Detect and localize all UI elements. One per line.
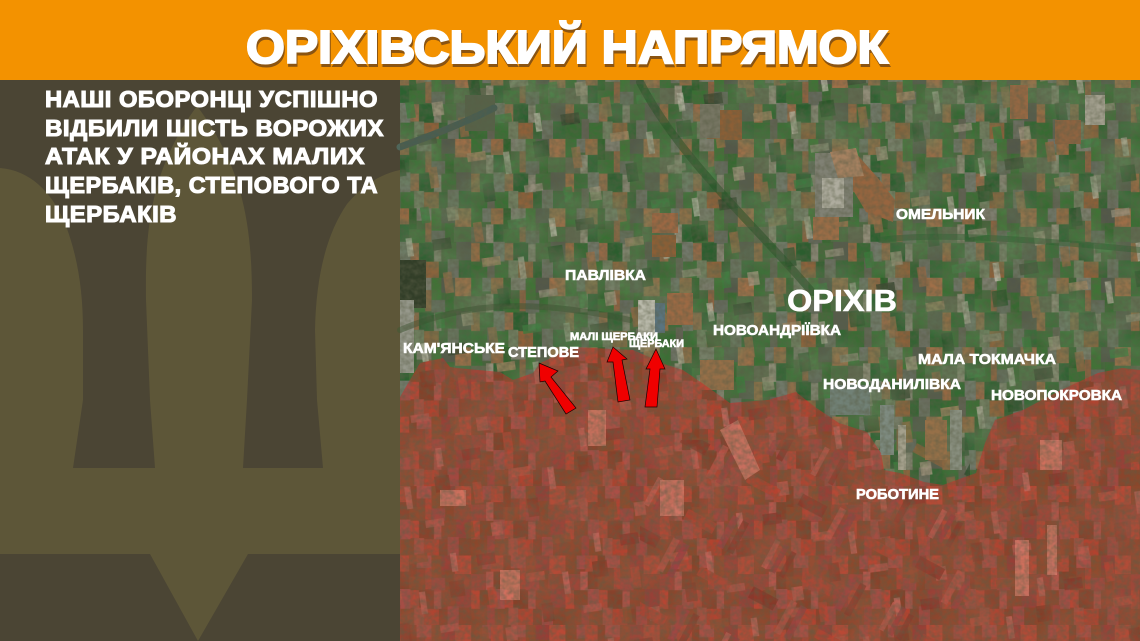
label: Orikhiv: ОРІХІВ xyxy=(787,283,897,318)
map fields xyxy=(400,80,1140,641)
arrow: attack on Stepove xyxy=(539,363,576,414)
map labels xyxy=(403,206,1122,503)
label: Mali Shcherbaky: МАЛІ ЩЕРБАКИ xyxy=(570,331,658,343)
distinct fields xyxy=(400,85,1105,470)
label: Stepove: СТЕПОВЕ xyxy=(508,344,579,361)
text block: summary: ЩЕРБАКІВ xyxy=(45,201,177,227)
text block: summary: ВІДБИЛИ ШІСТЬ ВОРОЖИХ xyxy=(45,115,384,141)
text block: summary xyxy=(45,86,384,227)
label: Robotyne: РОБОТИНЕ xyxy=(856,486,939,503)
label: Novodanylivka: НОВОДАНИЛІВКА xyxy=(823,376,961,393)
arrow: attack on Mali Shcherbaky xyxy=(607,347,630,402)
label: Novoandriivka: НОВОАНДРІЇВКА xyxy=(713,322,841,339)
river and green valleys xyxy=(400,82,1140,330)
pale fields within occupied area xyxy=(440,410,1062,600)
text block: summary: АТАК У РАЙОНАХ МАЛИХ xyxy=(45,142,365,169)
icon: trident emblem xyxy=(0,106,400,641)
label: Omelnyk: ОМЕЛЬНИК xyxy=(896,206,986,223)
text block: summary: НАШІ ОБОРОНЦІ УСПІШНО xyxy=(45,86,378,112)
panel: satellite map xyxy=(400,80,1140,641)
label: Shcherbaky: ЩЕРБАКИ xyxy=(629,338,684,350)
occupied territory overlay xyxy=(400,347,1140,641)
label: Pavlivka: ПАВЛІВКА xyxy=(565,267,646,284)
label: Novopokrovka: НОВОПОКРОВКА xyxy=(991,387,1122,404)
header bar xyxy=(0,0,1140,80)
text block: summary: ЩЕРБАКІВ, СТЕПОВОГО ТА xyxy=(45,172,378,198)
label: Kamianske: КАМ'ЯНСЬКЕ xyxy=(403,340,505,357)
label: Mala Tokmachka: МАЛА ТОКМАЧКА xyxy=(918,351,1056,368)
arrow: attack on Shcherbaky xyxy=(645,349,665,407)
tone xyxy=(400,80,1140,641)
panel: left background xyxy=(0,80,400,641)
title: ОРІХІВСЬКИЙ НАПРЯМОК xyxy=(246,21,889,73)
